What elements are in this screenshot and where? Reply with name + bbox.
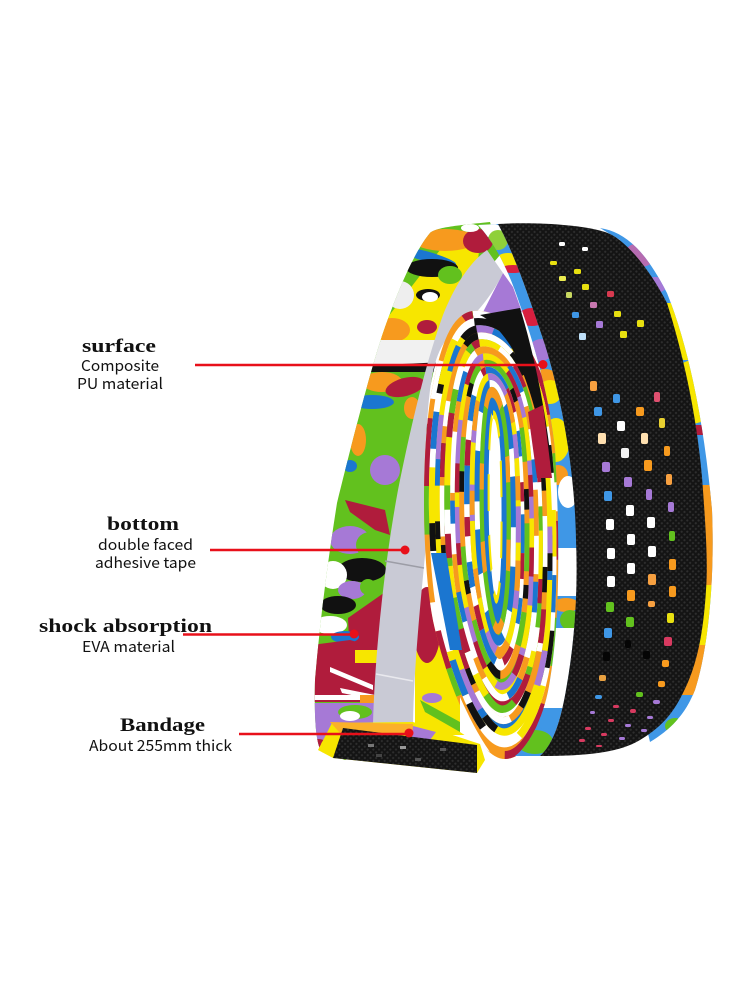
heading: Bandage: Bandage [120, 715, 205, 736]
callout: bottom [95, 514, 410, 573]
text: EVA material: EVA material [82, 636, 175, 657]
heading: bottom: bottom [107, 514, 179, 535]
heading: surface: surface [82, 336, 156, 357]
bandage tab at tape end [318, 722, 485, 773]
black perforated surface band [498, 223, 707, 756]
pointer: shock absorption [183, 630, 358, 638]
dark arc and red strip on outer roll [431, 308, 552, 650]
callout: bandage [89, 715, 414, 756]
left outer band with camouflage pattern [314, 222, 500, 760]
notch between band and roll [460, 697, 490, 752]
text: composite PU material [77, 355, 163, 394]
text: composite PU material: PU material [77, 373, 163, 394]
pointer: surface [195, 360, 548, 369]
callout: surface [77, 336, 548, 394]
text: about 255mm thick: About 255mm thick [89, 735, 233, 756]
illustration: rolled handlebar tape [300, 210, 720, 773]
callout: shock absorption [39, 616, 358, 657]
text: double faced adhesive tape: adhesive tape [95, 552, 196, 573]
text: double faced adhesive tape [95, 534, 196, 573]
nested rolled layers [428, 315, 558, 755]
pointer: bandage [239, 728, 414, 738]
text: composite PU material: Composite [81, 355, 159, 376]
side edge of outer layer with colour pattern [478, 224, 576, 756]
pointer: bottom [210, 546, 410, 554]
perforation holes [550, 242, 676, 747]
text: double faced adhesive tape: double faced [98, 534, 193, 555]
grey double-faced adhesive tape [373, 250, 503, 724]
inner layer behind grey tape [413, 273, 522, 735]
right edge of tape with colour pattern [600, 220, 720, 750]
heading: shock absorption: shock absorption [39, 616, 213, 637]
